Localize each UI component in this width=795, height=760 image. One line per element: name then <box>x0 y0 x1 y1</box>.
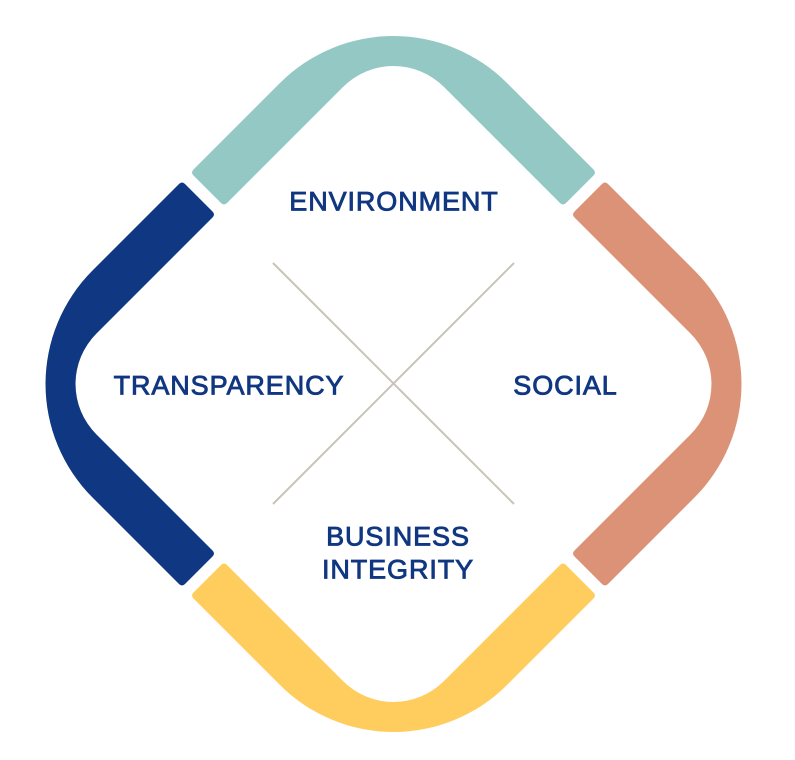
label: business integrity: BUSINESS <box>326 522 470 552</box>
segment: environment (teal, top) <box>192 36 595 204</box>
label: transparency: TRANSPARENCY <box>114 370 344 400</box>
segment: social (orange, right) <box>573 182 741 586</box>
label: social: SOCIAL <box>513 370 618 400</box>
center cross lines <box>273 263 514 504</box>
label: business integrity: INTEGRITY <box>322 554 474 584</box>
label: business integrity <box>322 522 474 584</box>
segment: transparency (navy, left) <box>46 182 214 586</box>
segment: business integrity (yellow, bottom) <box>192 564 595 732</box>
label: environment: ENVIRONMENT <box>289 186 499 216</box>
